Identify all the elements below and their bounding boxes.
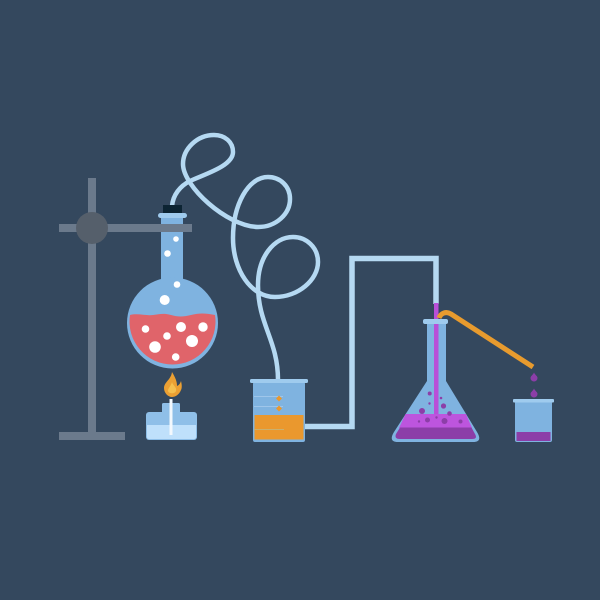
purple bubbles xyxy=(418,392,462,424)
icon: retort stand xyxy=(59,178,192,440)
flask bubbles xyxy=(142,236,208,361)
icon: spirit burner xyxy=(146,399,197,440)
icon: flame xyxy=(164,372,182,397)
icon: purple drops xyxy=(530,372,538,398)
icon: beaker with orange liquid xyxy=(250,379,308,442)
dark purple liquid xyxy=(396,428,476,439)
icon: connecting tube xyxy=(305,258,436,426)
bright purple liquid xyxy=(399,414,472,428)
icon: coiled tube from round flask to beaker xyxy=(172,135,318,380)
purple tube xyxy=(434,303,438,414)
orange bubbles xyxy=(276,396,282,412)
flask liquid xyxy=(130,314,216,365)
icon: conical flask xyxy=(392,303,479,442)
icon: orange delivery tube xyxy=(439,313,533,367)
icon: round-bottom flask xyxy=(127,205,218,368)
icon: small beaker xyxy=(513,399,554,442)
